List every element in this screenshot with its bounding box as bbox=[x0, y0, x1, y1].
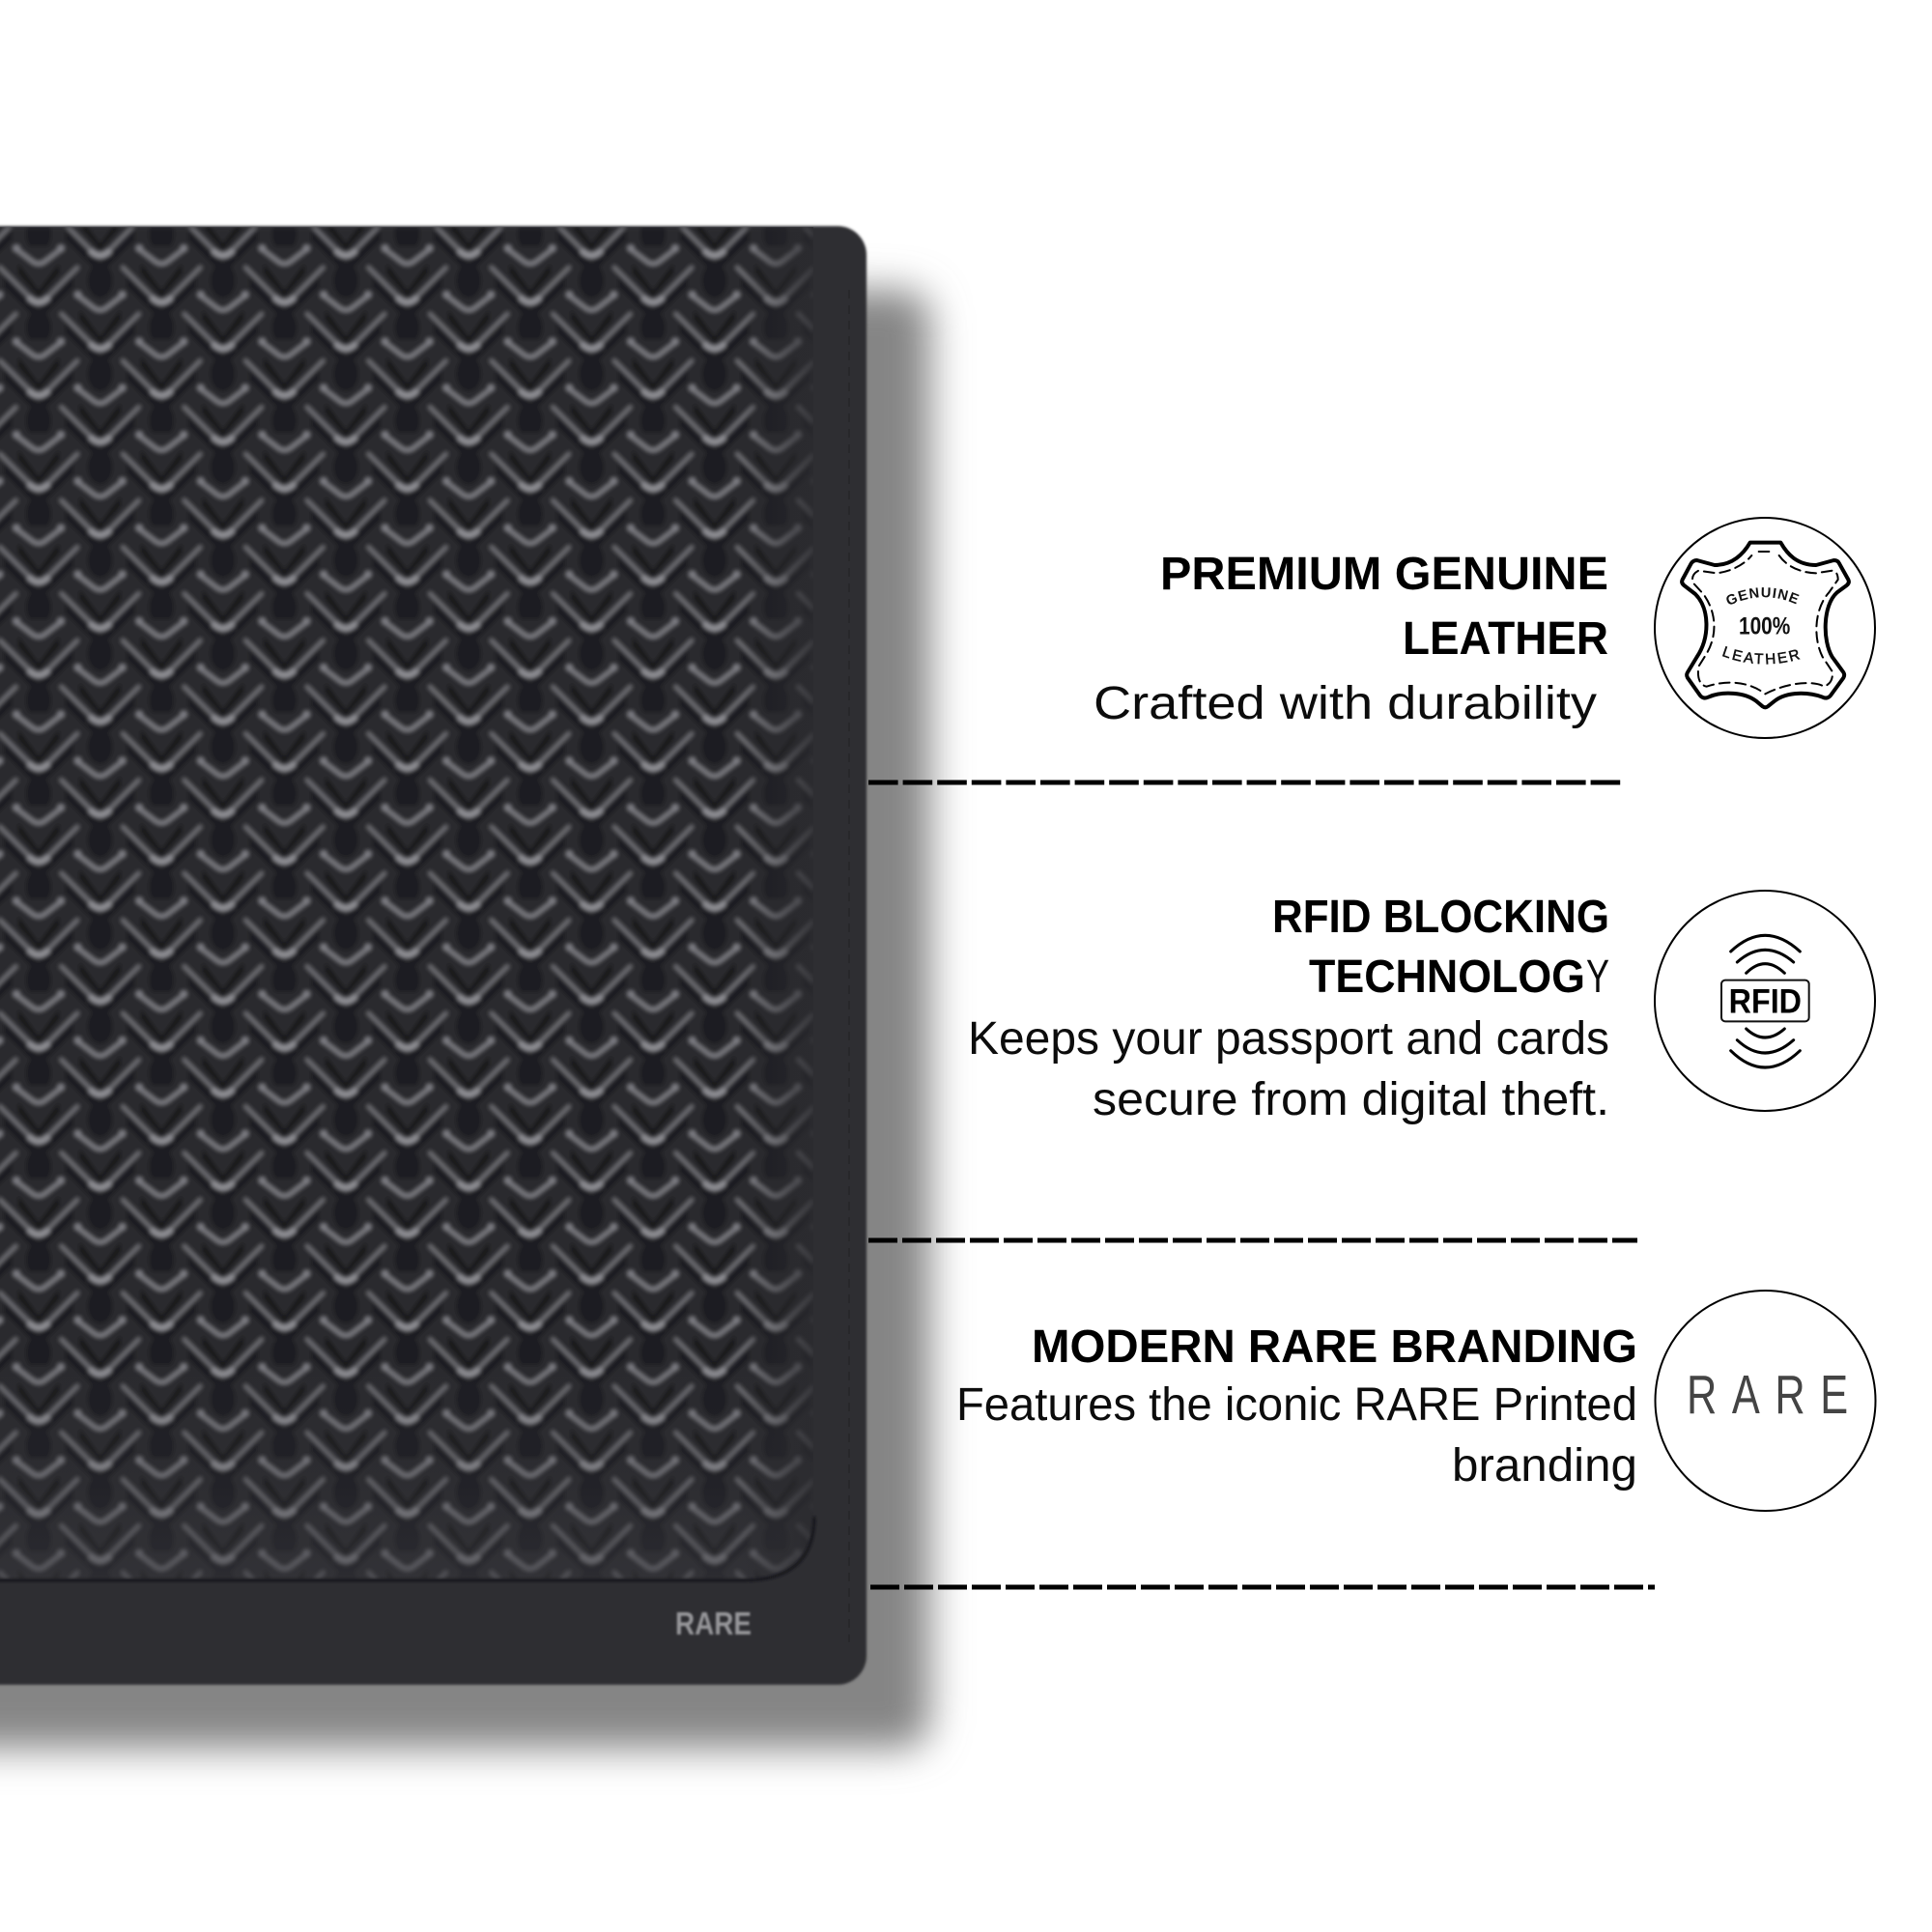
description bbox=[968, 1013, 1609, 1125]
wallet photo bbox=[0, 226, 867, 1685]
RFID label box bbox=[1721, 980, 1809, 1021]
flap edge bbox=[0, 1517, 814, 1580]
description: secure from digital theft. bbox=[1093, 1074, 1609, 1125]
icon: genuine leather badge bbox=[1654, 517, 1876, 739]
icon: RFID badge bbox=[1655, 891, 1875, 1111]
badge text: GENUINE bbox=[1726, 587, 1799, 605]
divider line 2 bbox=[868, 1238, 1637, 1242]
wallet logo: RARE: RARE bbox=[675, 1605, 752, 1641]
heading bbox=[1160, 549, 1608, 665]
feature text: modern RARE branding bbox=[956, 1321, 1637, 1492]
icon: RARE brand badge bbox=[1656, 1291, 1876, 1511]
embossed chevron leather flap bbox=[0, 227, 813, 1579]
heading: RFID BLOCKING bbox=[1272, 892, 1609, 943]
RFID label text: RFID bbox=[1729, 982, 1802, 1020]
wallet stitching bbox=[848, 290, 850, 1642]
description: Features the iconic RARE Printed bbox=[956, 1379, 1637, 1431]
stitching bbox=[1692, 552, 1838, 694]
badge text: 100% bbox=[1739, 614, 1790, 640]
description bbox=[956, 1379, 1637, 1492]
heading: PREMIUM GENUINE bbox=[1160, 549, 1608, 600]
description: branding bbox=[1452, 1440, 1637, 1492]
heading: Y bbox=[1586, 952, 1609, 1003]
description: Crafted with durability bbox=[1094, 678, 1597, 729]
description: Keeps your passport and cards bbox=[968, 1013, 1609, 1065]
heading bbox=[1272, 892, 1609, 1003]
wallet drop shadow bbox=[0, 290, 930, 1748]
signal waves bbox=[1731, 935, 1800, 1067]
badge text: LEATHER bbox=[1721, 645, 1801, 665]
wallet body bbox=[0, 226, 867, 1685]
divider line 1 bbox=[868, 781, 1621, 784]
heading: TECHNOLOG bbox=[1309, 952, 1585, 1003]
heading: LEATHER bbox=[1403, 613, 1608, 665]
badge text bbox=[1721, 587, 1801, 665]
leather hide outline bbox=[1682, 543, 1849, 707]
divider line 3 bbox=[870, 1584, 1655, 1590]
feature text: RFID blocking technology bbox=[968, 892, 1609, 1125]
heading: MODERN RARE BRANDING bbox=[1032, 1321, 1637, 1373]
feature text: premium genuine leather bbox=[1094, 549, 1608, 729]
brand wordmark: RARE bbox=[1687, 1363, 1848, 1425]
